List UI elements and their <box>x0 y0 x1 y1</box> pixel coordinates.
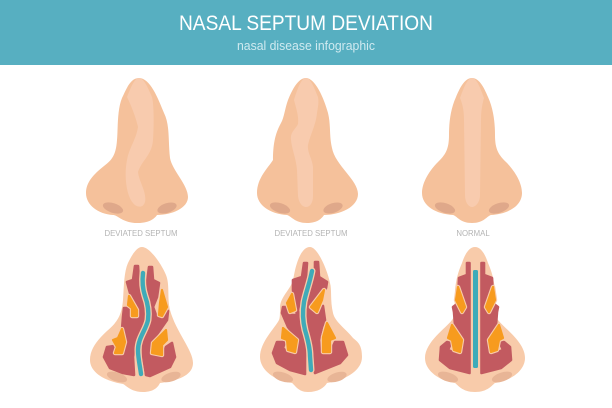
header banner <box>0 0 612 65</box>
nostrils <box>437 369 513 385</box>
nostrils <box>272 369 348 385</box>
septum <box>138 273 148 374</box>
cross-section: normal <box>425 247 525 392</box>
septum <box>303 271 312 370</box>
nasal cavity right <box>305 262 347 373</box>
nasal cavity right <box>143 267 175 376</box>
nostrils <box>106 369 182 385</box>
cross-section: deviated septum, middle <box>260 247 362 392</box>
turbinates <box>282 290 335 352</box>
nasal cavity left <box>440 263 470 373</box>
external nose: deviated septum, left <box>86 78 188 223</box>
external nose: deviated septum, middle <box>257 78 358 223</box>
label: deviated septum middle: DEVIATED SEPTUM <box>274 229 348 238</box>
title: NASAL SEPTUM DEVIATION <box>179 11 433 35</box>
external nose: normal <box>422 78 522 223</box>
turbinates <box>448 287 503 352</box>
subtitle: nasal disease infographic <box>237 39 375 53</box>
nasal cavity left <box>104 266 145 375</box>
nasal cavity left <box>273 263 307 374</box>
nasal cavity right <box>482 263 511 373</box>
label: normal: NORMAL <box>456 229 490 238</box>
septum <box>473 270 478 368</box>
label: deviated septum left: DEVIATED SEPTUM <box>104 229 178 238</box>
cross-section: deviated septum, left <box>90 247 193 392</box>
turbinates <box>113 290 167 355</box>
